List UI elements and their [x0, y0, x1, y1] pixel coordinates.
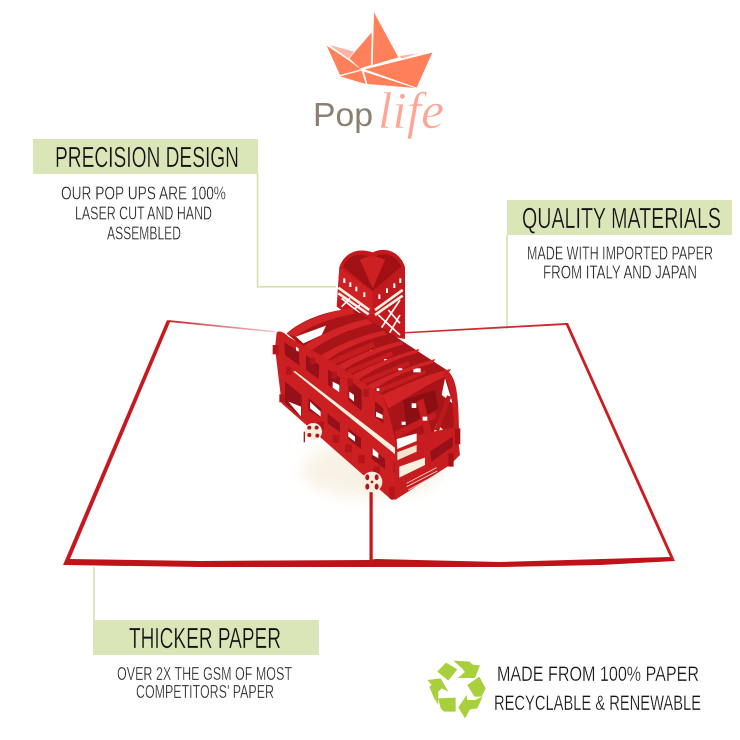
logo: Poplife paper boat	[313, 12, 444, 140]
callout: precision design: ASSEMBLED	[107, 224, 181, 244]
bus upper deck interior	[287, 309, 458, 452]
bus side panel	[273, 332, 398, 500]
callout: quality materials	[507, 200, 732, 282]
front wheel	[362, 472, 382, 492]
bus roof ribs	[287, 308, 459, 428]
card left edge	[63, 320, 170, 565]
upper deck windows	[284, 342, 383, 423]
interior cross pieces	[330, 342, 437, 442]
recyclable note	[494, 663, 701, 715]
card top edges	[168, 320, 566, 334]
phone box tower	[337, 250, 405, 339]
callout: precision design: PRECISION DESIGN	[55, 142, 239, 174]
callout: precision design: OUR POP UPS ARE 100%	[61, 184, 226, 204]
card centre fold	[370, 488, 373, 564]
pop-up card	[63, 320, 675, 567]
pop-up London bus and phone box	[273, 250, 460, 500]
interior paper gaps	[358, 339, 427, 425]
logo: Poplife paper boat: life	[378, 83, 444, 140]
callout: thicker paper	[93, 620, 319, 702]
cream stripe	[293, 371, 397, 455]
callout: precision design	[33, 139, 258, 244]
folded tabs	[273, 345, 398, 499]
bus shadow on card	[302, 442, 442, 498]
bus front	[395, 395, 460, 500]
bus wheels	[304, 423, 382, 492]
icon: recycling arrows	[427, 661, 486, 718]
lower deck windows	[285, 382, 385, 469]
callout: precision design: LASER CUT AND HAND	[75, 204, 212, 224]
callout: thicker paper: THICKER PAPER	[129, 623, 281, 655]
card right edge	[565, 323, 675, 561]
callout: thicker paper: COMPETITORS' PAPER	[136, 682, 274, 702]
rear wheel	[304, 423, 322, 442]
callout: thicker paper: OVER 2X THE GSM OF MOST	[117, 664, 292, 684]
connector lines	[94, 173, 507, 620]
card bottom edge	[63, 557, 675, 567]
logo: Poplife paper boat: Pop	[313, 96, 373, 133]
